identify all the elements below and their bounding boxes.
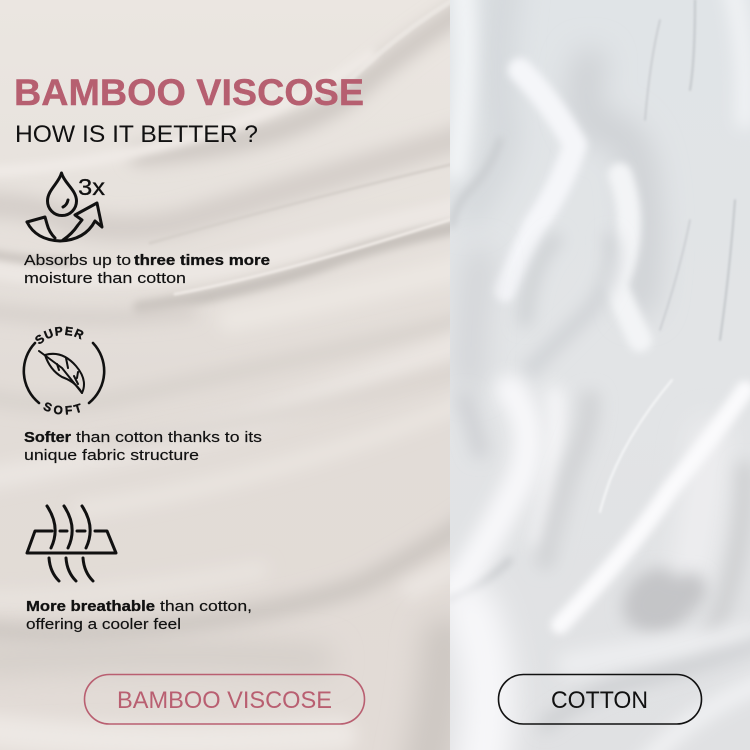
text: softness benefit [24,430,262,464]
text: breathability benefit: than cotton, [160,599,252,615]
text: moisture benefit: three times more [134,253,270,269]
panel: bamboo viscose fabric background [0,0,470,750]
text: softness benefit: unique fabric structure [24,448,199,464]
button: bamboo viscose label: BAMBOO VISCOSE [117,687,332,714]
button: cotton label: COTTON [551,687,648,714]
panel: cotton fabric background [450,0,750,750]
icon: super soft feather badge: SUPER [35,326,84,344]
title: BAMBOO VISCOSE [14,72,364,113]
icon: moisture drop with arrow: 3x [78,174,106,200]
button: cotton label [498,674,702,724]
text: breathability benefit [26,599,252,633]
icon: super soft feather badge: SOFT [43,402,81,415]
text: moisture benefit: moisture than cotton [24,271,186,287]
text: softness benefit: Softer [24,430,71,446]
icon: moisture drop with arrow [27,173,106,241]
text: moisture benefit [24,253,270,287]
text: breathability benefit: offering a cooler feel [26,617,181,633]
text: breathability benefit: More breathable [26,599,155,615]
text: moisture benefit: Absorbs up to [24,253,131,269]
text: softness benefit: than cotton thanks to its [76,430,262,446]
button: bamboo viscose label [84,674,364,724]
icon: super soft feather badge [22,326,106,415]
icon: breathable fabric layer [27,506,116,581]
subtitle: HOW IS IT BETTER ? [15,121,258,148]
